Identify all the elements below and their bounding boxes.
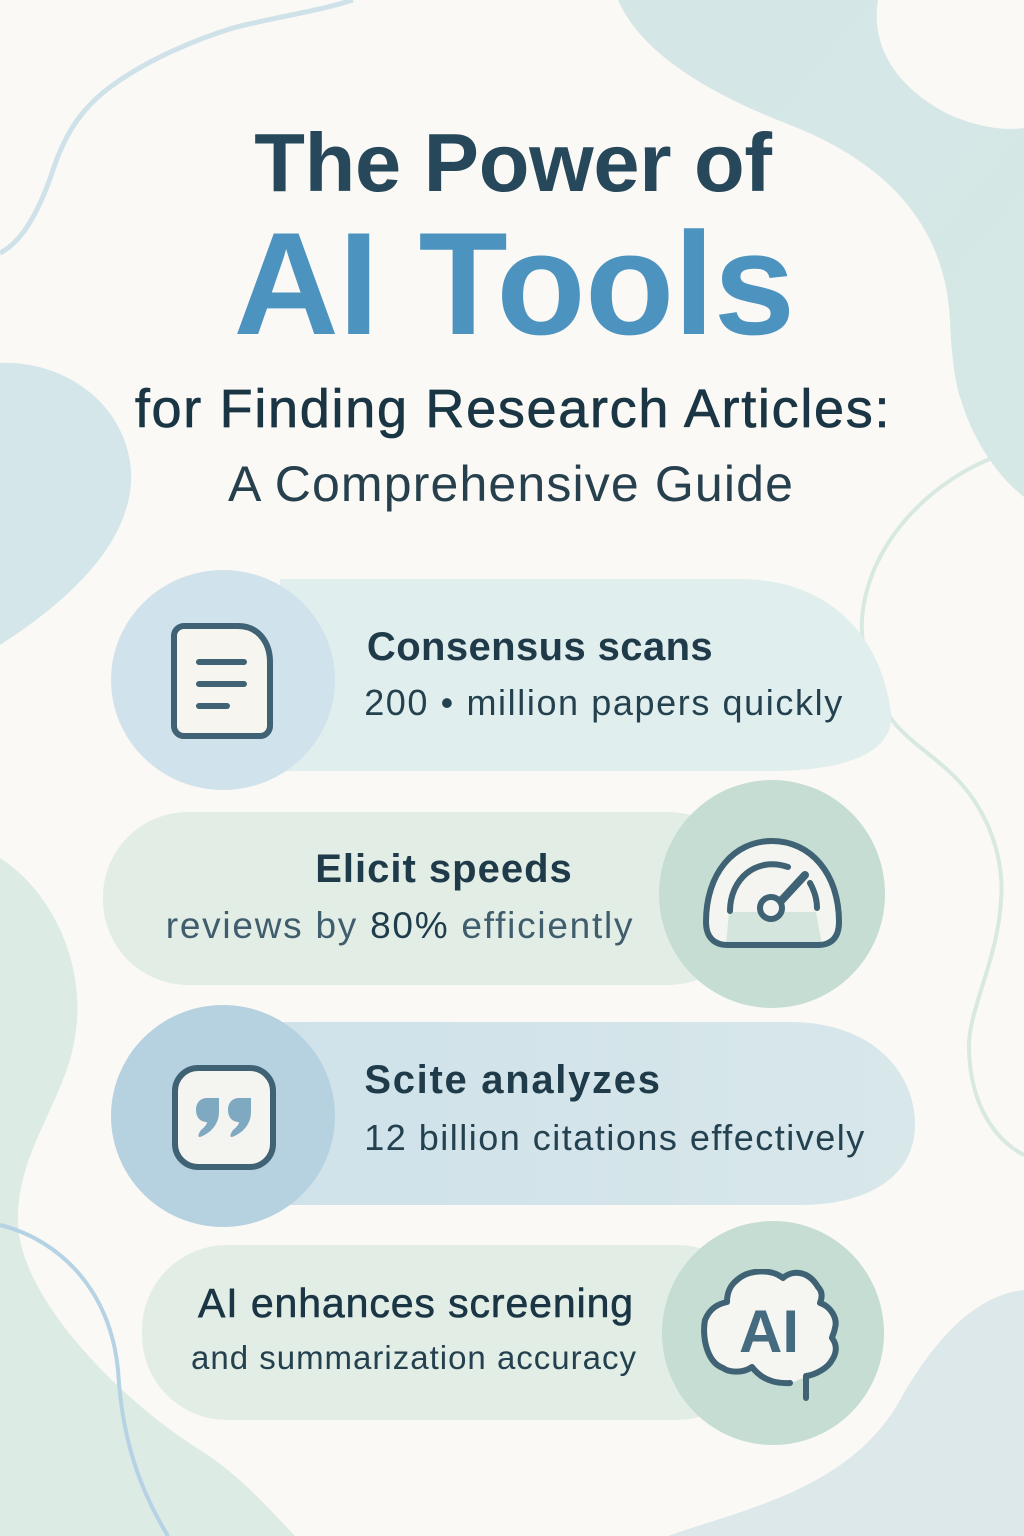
panel: Scite	[111, 1005, 915, 1227]
title: The Power of	[254, 116, 772, 209]
icon: quote	[172, 1065, 276, 1170]
panel: AI: AI enhances screening	[198, 1280, 634, 1326]
panel: Consensus: Consensus scans	[367, 625, 713, 669]
panel: Scite: 12 billion citations effectively	[364, 1117, 866, 1158]
icon: AI brain	[701, 1269, 839, 1401]
panel: AI	[142, 1221, 884, 1445]
icon: gauge	[703, 838, 842, 948]
title: A Comprehensive Guide	[228, 456, 794, 512]
panel: Scite: Scite analyzes	[364, 1058, 662, 1102]
panel: Elicit: reviews by 80% efficiently	[166, 905, 634, 946]
panel: Consensus	[111, 570, 891, 790]
icon: AI brain: AI	[739, 1298, 799, 1365]
icon: document	[171, 623, 273, 739]
panel: AI: and summarization accuracy	[191, 1339, 637, 1376]
panel: Elicit: Elicit speeds	[315, 847, 573, 891]
title: for Finding Research Articles:	[135, 379, 891, 439]
title: AI Tools	[233, 202, 795, 365]
panel: Consensus: 200 • million papers quickly	[364, 682, 844, 723]
title	[135, 116, 891, 512]
panel: Elicit	[103, 780, 885, 1008]
